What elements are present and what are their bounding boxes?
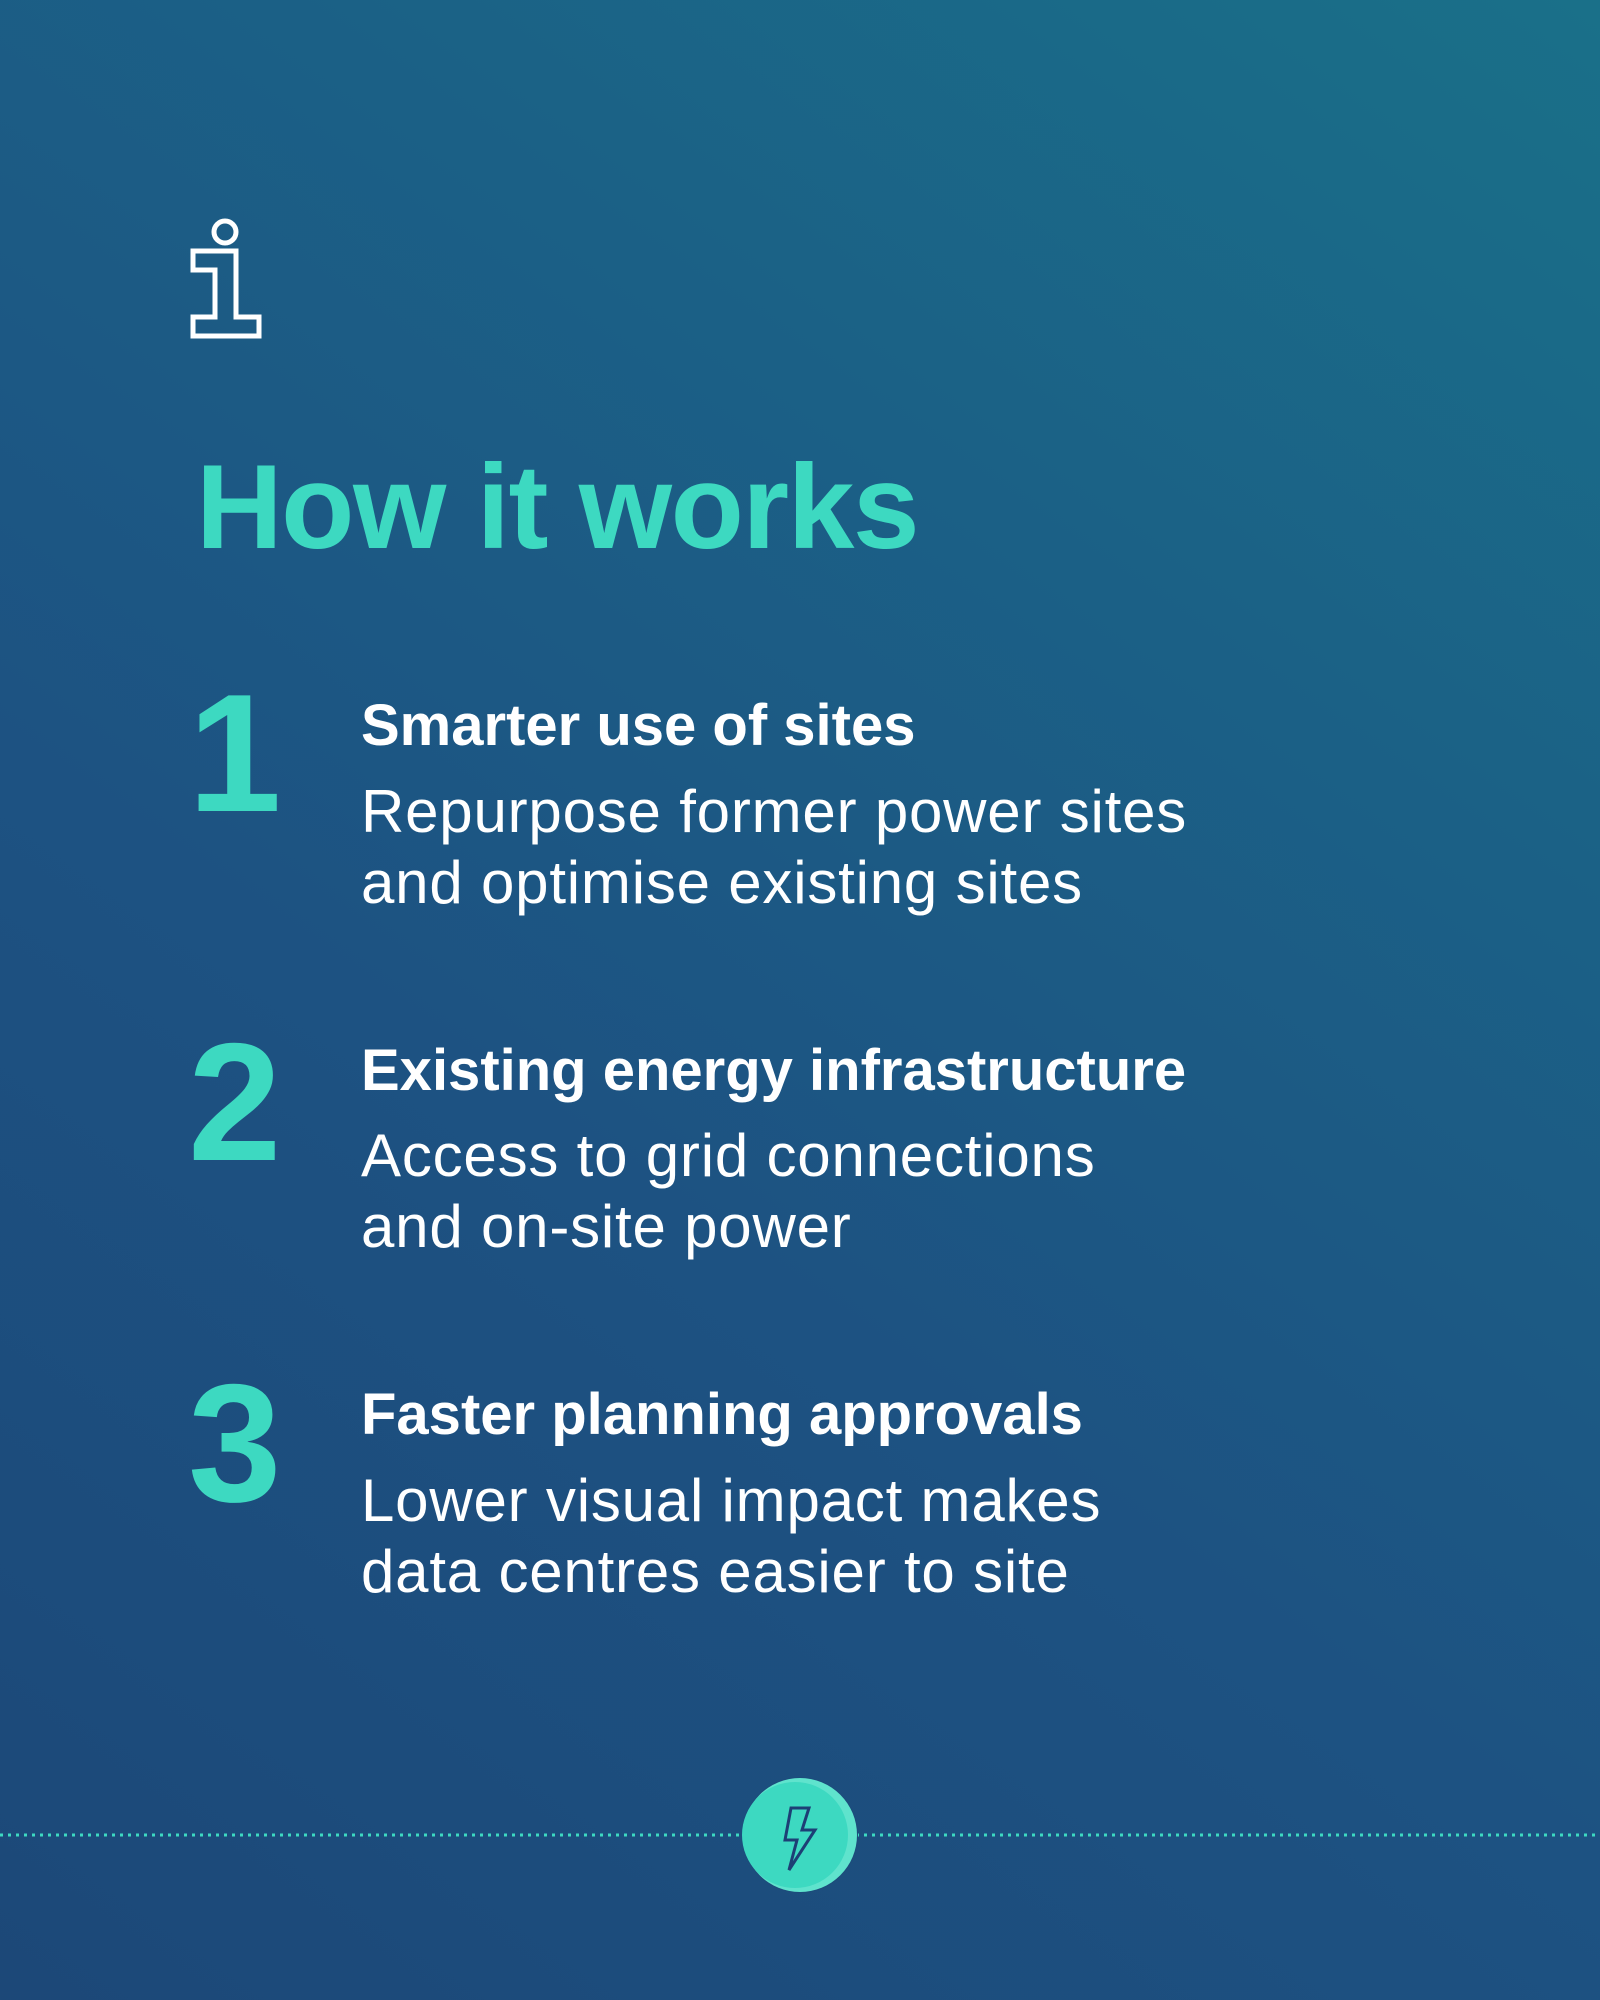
item 3	[188, 1349, 1101, 1605]
body 2: and on-site power	[361, 1193, 852, 1260]
body 1: Repurpose former power sites	[361, 778, 1187, 845]
body 3: Lower visual impact makes	[361, 1467, 1101, 1534]
number 2: 2	[188, 1008, 281, 1196]
body 3	[361, 1467, 1101, 1605]
body 1	[361, 778, 1187, 916]
footer: dotted line with bolt icon	[0, 1778, 1595, 1892]
number 1: 1	[188, 659, 281, 847]
heading 1: Smarter use of sites	[361, 693, 915, 758]
body 1: and optimise existing sites	[361, 849, 1083, 916]
body 2	[361, 1122, 1096, 1260]
icon: info	[190, 218, 262, 338]
item 1	[188, 659, 1187, 916]
body 3: data centres easier to site	[361, 1538, 1070, 1605]
number 3: 3	[188, 1349, 281, 1537]
item 2	[188, 1008, 1186, 1260]
heading 2: Existing energy infrastructure	[361, 1038, 1186, 1103]
body 2: Access to grid connections	[361, 1122, 1096, 1189]
heading 3: Faster planning approvals	[361, 1382, 1083, 1447]
title: How it works	[196, 440, 918, 574]
